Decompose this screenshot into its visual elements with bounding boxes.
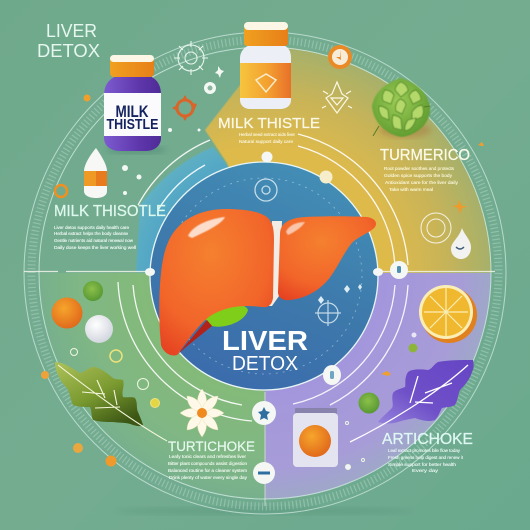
section: turtichoke text: Drink plenty of water every single day — [169, 475, 248, 480]
timeline nodes — [145, 152, 408, 484]
supplement balls — [52, 281, 418, 414]
inner arcs — [118, 134, 408, 421]
icon: orange clock — [328, 45, 352, 69]
corner title: LIVER — [46, 20, 97, 41]
quadrant: turmeric yellow — [205, 47, 491, 273]
section: turtichoke text: Balanced routine for a cleaner system — [168, 468, 248, 473]
central title: DETOX — [232, 353, 298, 375]
orange slice — [419, 285, 477, 343]
disc decoration — [166, 178, 362, 374]
right lobe — [278, 216, 376, 300]
section: turtichoke text: TURTICHOKE — [168, 439, 255, 454]
flower — [180, 389, 224, 437]
gallbladder — [204, 304, 248, 327]
section: milk thistle text: MILK THISTLE — [218, 115, 320, 132]
section: artichoke text — [382, 431, 473, 473]
purple leaf — [350, 360, 474, 442]
section: milk thistle text: Herbal seed extract aids liver — [239, 132, 296, 137]
bottle: purple milk thistle: THISTLE — [106, 117, 159, 133]
artichoke icon: green — [372, 78, 431, 138]
green leaf — [55, 362, 167, 441]
corner title: DETOX — [37, 40, 100, 61]
section: turmerico text: Antioxidant care for the liver daily — [385, 180, 459, 185]
section: milk thisotle text: Gentle nutrients aid natural renewal now — [54, 238, 134, 243]
section: artichoke text: Simple support for better health — [388, 462, 457, 467]
section: turtichoke text: Leafy tonic clears and refreshes liver — [169, 454, 247, 459]
icon: white emblem — [322, 82, 352, 113]
section: turmerico text: Root powder soothes and protects — [384, 166, 455, 171]
section: artichoke text: Every day — [412, 468, 439, 473]
section: artichoke text: Fresh greens help digest and renew it — [388, 455, 464, 460]
section: milk thisotle text: MILK THISOTLE — [54, 203, 166, 220]
quadrant: green — [39, 273, 265, 499]
bottle: orange capsule jar — [240, 22, 291, 109]
icon: target ring and drop — [421, 213, 471, 259]
section: turtichoke text: Bitter plant compounds assist digestion — [168, 461, 248, 466]
section: milk thisotle text: Liver detox supports daily health care — [54, 225, 130, 230]
axis lines — [24, 272, 495, 506]
section: artichoke text: Leaf extract promotes bile flow today — [388, 448, 461, 453]
bottle: purple milk thistle: MILK — [116, 102, 149, 121]
left lobe — [159, 209, 274, 355]
orange accents — [41, 94, 484, 466]
central title: LIVER — [222, 325, 308, 356]
section: milk thisotle text — [54, 203, 166, 250]
central title — [222, 325, 308, 375]
section: artichoke text: ARTICHOKE — [382, 431, 473, 448]
liver — [159, 209, 376, 355]
white divider — [266, 221, 282, 306]
flower centre — [197, 408, 207, 418]
icon: small white marks — [122, 66, 224, 195]
section: turmerico text: Golden spice supports the body — [384, 173, 453, 178]
icon: orange sun gear — [172, 95, 197, 121]
highlights — [188, 217, 225, 238]
small dots — [70, 348, 364, 470]
supplement jar — [293, 408, 338, 467]
icon: white gear — [174, 41, 208, 75]
quadrant: blue arc band — [136, 147, 264, 276]
section: milk thisotle text: Herbal extract helps the body cleanse — [54, 231, 129, 236]
section: milk thisotle text: Daily dose keeps the liver working well — [54, 245, 136, 250]
central blue disc — [150, 162, 378, 390]
lobe shadow — [177, 320, 212, 355]
quadrant: artichoke purple — [265, 273, 491, 499]
section: milk thistle text — [218, 115, 320, 144]
section: milk thistle text: Natural support daily care — [239, 139, 294, 144]
section: turtichoke text — [168, 439, 255, 480]
section: turmerico text — [380, 147, 470, 192]
corner title — [37, 20, 100, 61]
section: turmerico text: TURMERICO — [380, 147, 470, 164]
pill drop — [84, 148, 107, 198]
section: turmerico text: Take with warm meal — [389, 187, 433, 192]
bottle: purple milk thistle — [104, 55, 166, 154]
